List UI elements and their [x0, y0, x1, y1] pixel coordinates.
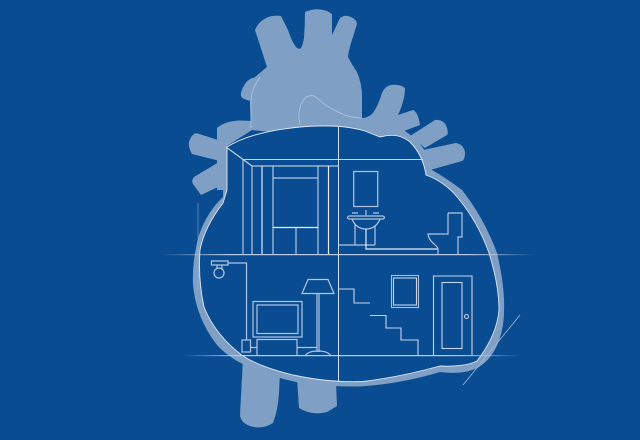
- vessel detail lines: [251, 77, 362, 128]
- small left atrial lobe: [241, 77, 260, 101]
- door: [434, 276, 472, 356]
- floor lamp: [302, 280, 334, 352]
- right lobe lower: [423, 143, 465, 170]
- television: [253, 302, 302, 337]
- aorta and upper vessels: [250, 9, 420, 140]
- room: hallway with stairs, picture and door: [338, 276, 472, 356]
- blueprint construction lines: [162, 126, 535, 385]
- house cutaway interior: [200, 126, 499, 382]
- lower vessel right: [297, 378, 337, 413]
- left atrial shoulder: [217, 120, 252, 190]
- drain pipe: [366, 229, 438, 249]
- heart: great vessels and outer lobes: [189, 9, 465, 427]
- room: living room with lamp and TV: [212, 261, 334, 356]
- room: bedroom with window and wardrobe: [243, 160, 339, 254]
- wall light: [212, 261, 228, 269]
- wire and socket: [228, 263, 246, 340]
- room: bathroom with mirror, sink and toilet: [338, 172, 462, 254]
- mirror: [354, 172, 378, 206]
- toilet: [428, 213, 462, 254]
- left lobe lower: [192, 162, 222, 195]
- stairs: [338, 289, 418, 356]
- lower vessel left: [240, 358, 280, 427]
- heart wall band: [193, 125, 504, 387]
- sink: [338, 210, 384, 245]
- left lobe upper: [189, 133, 220, 161]
- right lobe upper: [410, 120, 448, 148]
- picture: [392, 276, 418, 308]
- tv stand: [257, 340, 317, 356]
